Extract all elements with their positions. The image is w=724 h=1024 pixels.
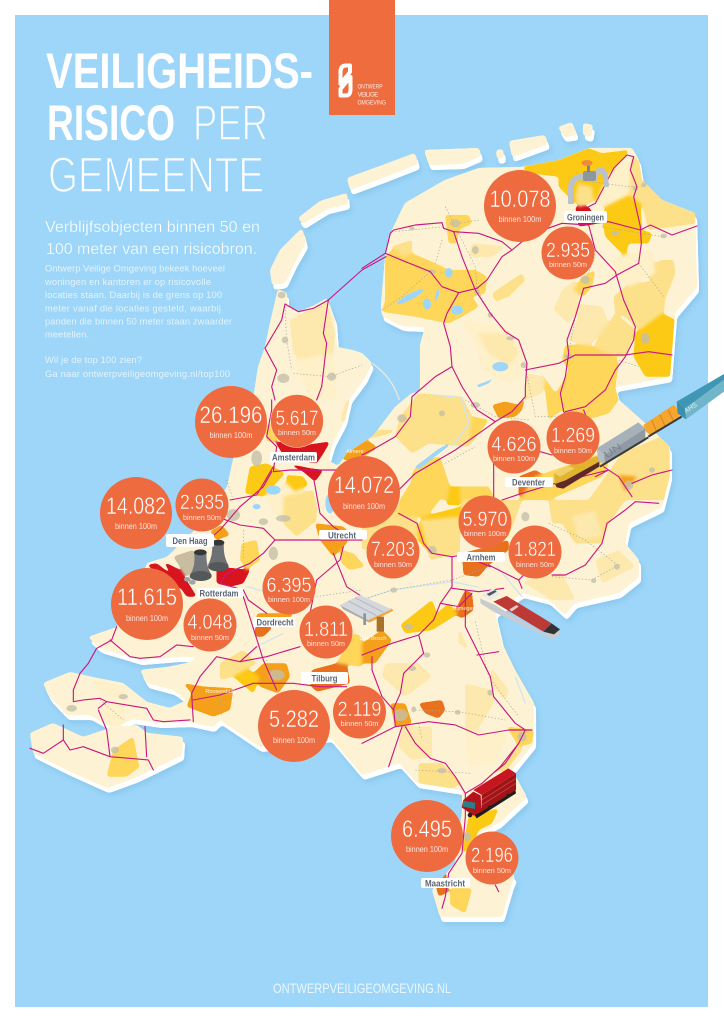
logo wordmark: OMGEVING (358, 100, 386, 106)
intro text block: panden die binnen 50 meter staan zwaarder (45, 316, 232, 326)
callout: Utrecht 100m: 14.072 (334, 472, 394, 499)
title: PER (193, 95, 268, 151)
callout: Groningen 50m (542, 226, 594, 280)
small town labels on map (205, 449, 476, 695)
callout: Amsterdam 50m (270, 394, 324, 448)
city label: Utrecht (319, 530, 367, 540)
callout: Dordrecht 100m (262, 562, 316, 614)
callout: Deventer 100m (488, 420, 540, 474)
subtitle: Verblijfsobjecten binnen 50 en (45, 219, 260, 236)
intro text block: meetellen. (45, 330, 89, 340)
callout: Den Haag 50m: binnen 50m (183, 513, 221, 522)
callout: Amsterdam 100m (195, 386, 267, 458)
callout: Dordrecht 50m (300, 606, 352, 658)
callout: Arnhem 100m: 5.970 (462, 508, 508, 531)
label on wagon: UN: UN (602, 442, 624, 461)
intro text block: meter vanaf die locaties gesteld, waarbij (45, 304, 221, 314)
intro text block: Wil je de top 100 zien? (45, 355, 142, 365)
city label: Deventer: Deventer (512, 478, 545, 488)
callout: Den Haag 50m (176, 478, 228, 532)
small town labels on map: Den Bosch (360, 636, 386, 642)
city label: Den Haag (166, 534, 214, 547)
map of the Netherlands (30, 122, 701, 925)
city label: Rotterdam: Rotterdam (200, 588, 238, 598)
callout: Amsterdam 100m: binnen 100m (210, 431, 253, 440)
callout: Groningen 100m (484, 170, 556, 242)
callout: Amsterdam 100m: 26.196 (200, 402, 262, 429)
title: VEILIGHEIDS- (46, 43, 313, 99)
intro text block: Ga naar ontwerpveiligeomgeving.nl/top100 (45, 369, 230, 379)
callout: Tilburg 100m: 5.282 (269, 706, 319, 733)
callout: Tilburg 50m: binnen 50m (340, 719, 378, 728)
subtitle (45, 219, 260, 258)
callout: Rotterdam 50m (184, 598, 236, 652)
small town labels on map: Roosendaal (205, 689, 235, 695)
callout: Maastricht 50m: binnen 50m (473, 866, 511, 875)
logo tab (329, 0, 395, 115)
callout: Maastricht 100m (391, 800, 463, 872)
callout: Dordrecht 50m: 1.811 (304, 618, 348, 641)
title (46, 43, 313, 203)
intro text block: Ontwerp Veilige Omgeving bekeek hoeveel (45, 264, 225, 274)
callout: Deventer 100m: binnen 100m (493, 454, 535, 463)
callout: Tilburg 50m: 2.119 (338, 698, 382, 721)
callout: Deventer 100m: 4.626 (492, 433, 536, 456)
callout: Rotterdam 50m: binnen 50m (191, 633, 229, 642)
callout: Maastricht 50m: 2.196 (471, 844, 513, 867)
callout: Utrecht 50m: binnen 50m (374, 560, 412, 569)
icon: cargo ship (480, 588, 560, 639)
callout: Groningen 50m: 2.935 (546, 239, 590, 262)
callout: Utrecht 50m: 7.203 (371, 538, 415, 561)
icon: train with containers (554, 374, 724, 489)
callout: Groningen 50m: binnen 50m (549, 260, 587, 269)
callout: Utrecht 100m (328, 456, 400, 528)
city label: Amsterdam: Amsterdam (272, 452, 315, 462)
callout: Den Haag 100m (100, 477, 172, 549)
callout: Arnhem 50m (508, 526, 562, 578)
callout: Tilburg 50m (333, 686, 386, 738)
city label: Den Haag: Den Haag (172, 536, 208, 546)
roads network (30, 155, 697, 908)
small town labels on map: Almere (346, 449, 364, 455)
callout: Rotterdam 100m: 11.615 (117, 584, 177, 611)
callout: Rotterdam 50m: 4.048 (188, 611, 232, 634)
city label: Arnhem (457, 552, 505, 562)
label on container: AHS: AHS (683, 401, 699, 415)
city label: Maastricht: Maastricht (425, 878, 465, 888)
icon: logo mark (340, 66, 350, 96)
title: RISICO (47, 95, 175, 151)
risk regions: choropleth fill (93, 148, 695, 913)
callout: Amsterdam 50m: binnen 50m (278, 428, 316, 437)
intro text block: locaties staan. Daarbij is de grens op 100 (45, 290, 222, 300)
callout: Tilburg 100m (258, 690, 330, 762)
icon: gas pipe with valve, Groningen (571, 160, 606, 204)
callout: Arnhem 100m: binnen 100m (464, 529, 506, 538)
callout: Arnhem 50m: binnen 50m (516, 560, 554, 569)
callout: Tilburg 100m: binnen 100m (273, 736, 315, 745)
icon: LPG filling station (340, 595, 393, 632)
callout: Groningen 100m: binnen 100m (498, 215, 542, 224)
callout: Rotterdam 100m: binnen 100m (126, 614, 168, 623)
callout: Dordrecht 100m: binnen 100m (268, 595, 310, 604)
callout: Den Haag 100m: 14.082 (106, 493, 166, 520)
city label: Arnhem: Arnhem (466, 552, 496, 562)
logo wordmark: VEILIGE (358, 92, 378, 98)
callout: Arnhem 50m: 1.821 (514, 538, 556, 561)
settlements (66, 183, 667, 841)
city label: Dordrecht: Dordrecht (256, 618, 294, 628)
callout: Dordrecht 100m: 6.395 (266, 574, 312, 597)
railways dotted (100, 180, 664, 773)
callout: Maastricht 100m: binnen 100m (406, 845, 448, 854)
city label: Utrecht: Utrecht (328, 530, 356, 540)
city label: Groningen: Groningen (567, 212, 604, 222)
callout: Utrecht 100m: binnen 100m (343, 502, 385, 511)
callout: Amsterdam 50m: 5.617 (276, 407, 318, 430)
callout: Arnhem 100m (458, 496, 512, 548)
title: GEMEENTE (48, 147, 264, 203)
callout: Den Haag 50m: 2.935 (180, 491, 224, 514)
city label: Tilburg (301, 672, 348, 684)
callout: Maastricht 100m: 6.495 (402, 816, 452, 843)
callout: Deventer 50m (546, 412, 600, 464)
lakes and waterways (247, 268, 525, 703)
callout: Groningen 100m: 10.078 (490, 186, 550, 213)
callout: Utrecht 50m (366, 526, 420, 578)
callout: Den Haag 100m: binnen 100m (115, 522, 157, 531)
logo wordmark: ONTWERP (358, 84, 382, 90)
intro text block (44, 264, 232, 379)
city label: Tilburg: Tilburg (312, 674, 338, 684)
callout: Deventer 50m: 1.269 (551, 424, 595, 447)
logo wordmark (358, 84, 386, 106)
intro text block: woningen en kantoren er op risicovolle (44, 277, 211, 287)
callout: Deventer 50m: binnen 50m (554, 446, 592, 455)
small town labels on map: Nijmegen (452, 606, 476, 612)
icon: red truck (462, 768, 516, 818)
callout: Rotterdam 100m (111, 568, 183, 640)
icon: cooling towers (184, 540, 229, 585)
callout: Maastricht 50m (466, 832, 518, 884)
footer url: ONTWERPVEILIGEOMGEVING.NL (273, 980, 451, 996)
subtitle: 100 meter van een risicobron. (46, 241, 257, 258)
callout: Dordrecht 50m: binnen 50m (307, 639, 345, 648)
